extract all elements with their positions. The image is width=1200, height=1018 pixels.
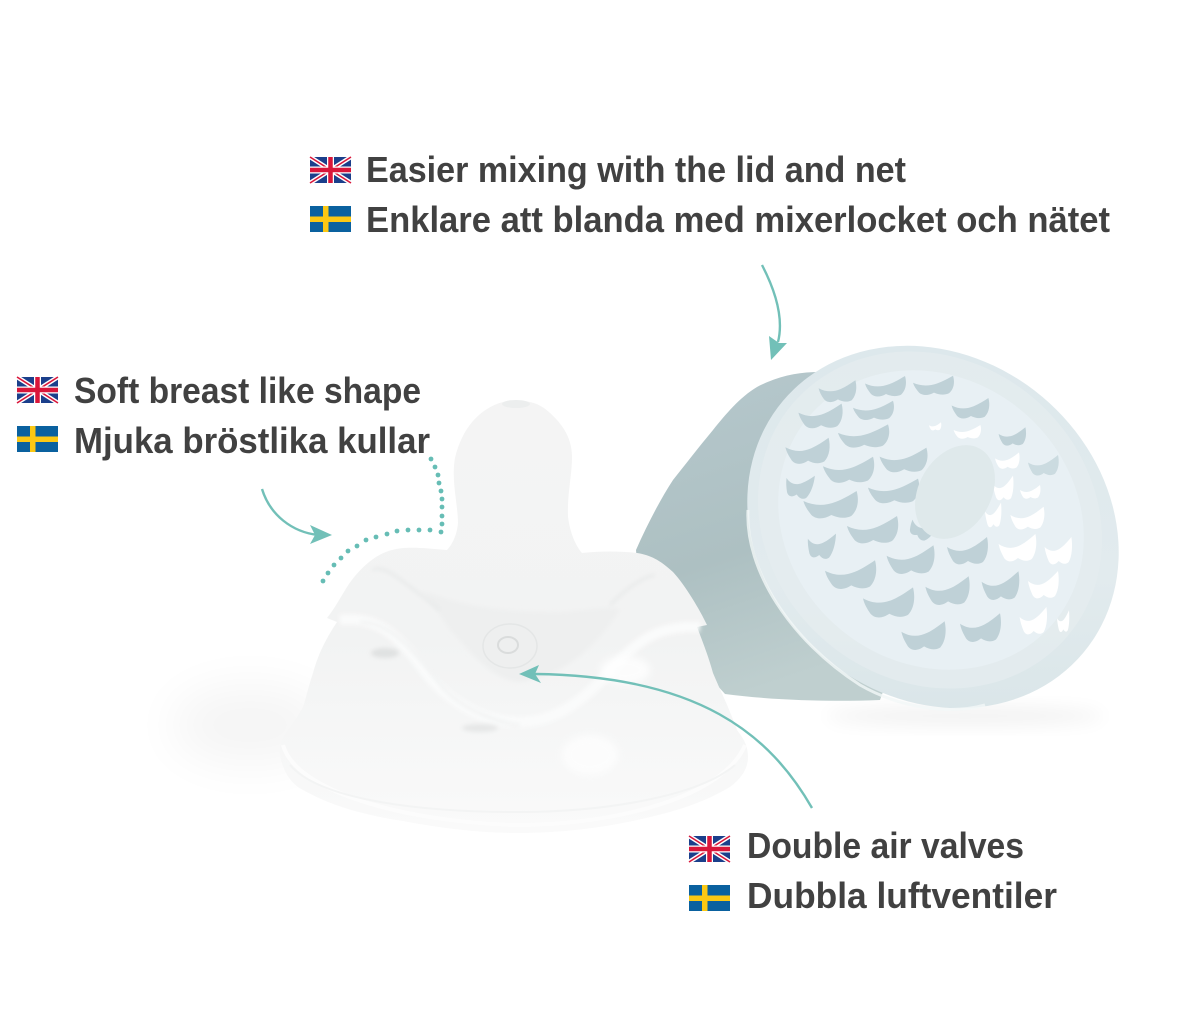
net holes: shaded side — [782, 376, 1059, 650]
soft shadows — [170, 685, 1105, 765]
English label: Soft breast like shape — [74, 370, 421, 411]
nipple and dome outline — [280, 400, 748, 833]
Swedish label: Mjuka bröstlika kullar — [74, 420, 430, 461]
base ring — [283, 745, 745, 825]
callout: air valves — [689, 825, 1057, 916]
net holes: bright side — [929, 422, 1072, 634]
product: green bottle cup — [636, 372, 930, 701]
inner saddle shading — [420, 590, 620, 682]
arrow: to nipple shoulder — [262, 489, 332, 544]
lid outer rim — [674, 271, 1192, 783]
Swedish flag — [310, 206, 351, 232]
dotted contour line — [321, 457, 444, 583]
UK flag — [689, 836, 730, 862]
arrow: to mixing lid — [762, 265, 787, 360]
air valve — [483, 624, 537, 668]
UK flag — [310, 157, 351, 183]
Swedish label: Dubbla luftventiler — [747, 875, 1057, 916]
product: silicone nipple — [280, 400, 748, 833]
dome shading — [371, 648, 399, 658]
shoulder ridges — [372, 569, 655, 610]
product: mixer lid with net — [674, 271, 1192, 783]
teat tip — [502, 400, 530, 408]
valley ridge — [340, 619, 700, 722]
English label: Double air valves — [747, 825, 1024, 866]
callout: breast like shape — [17, 370, 430, 461]
arrow: to air valve — [519, 665, 812, 808]
lid centre hub — [899, 431, 1011, 553]
English label: Easier mixing with the lid and net — [366, 149, 906, 190]
callout: mixing lid — [310, 149, 1110, 240]
Swedish label: Enklare att blanda med mixerlocket och nätet — [366, 199, 1110, 240]
Swedish flag — [17, 426, 58, 452]
UK flag — [17, 377, 58, 403]
lid net face — [717, 308, 1145, 732]
Swedish flag — [689, 885, 730, 911]
